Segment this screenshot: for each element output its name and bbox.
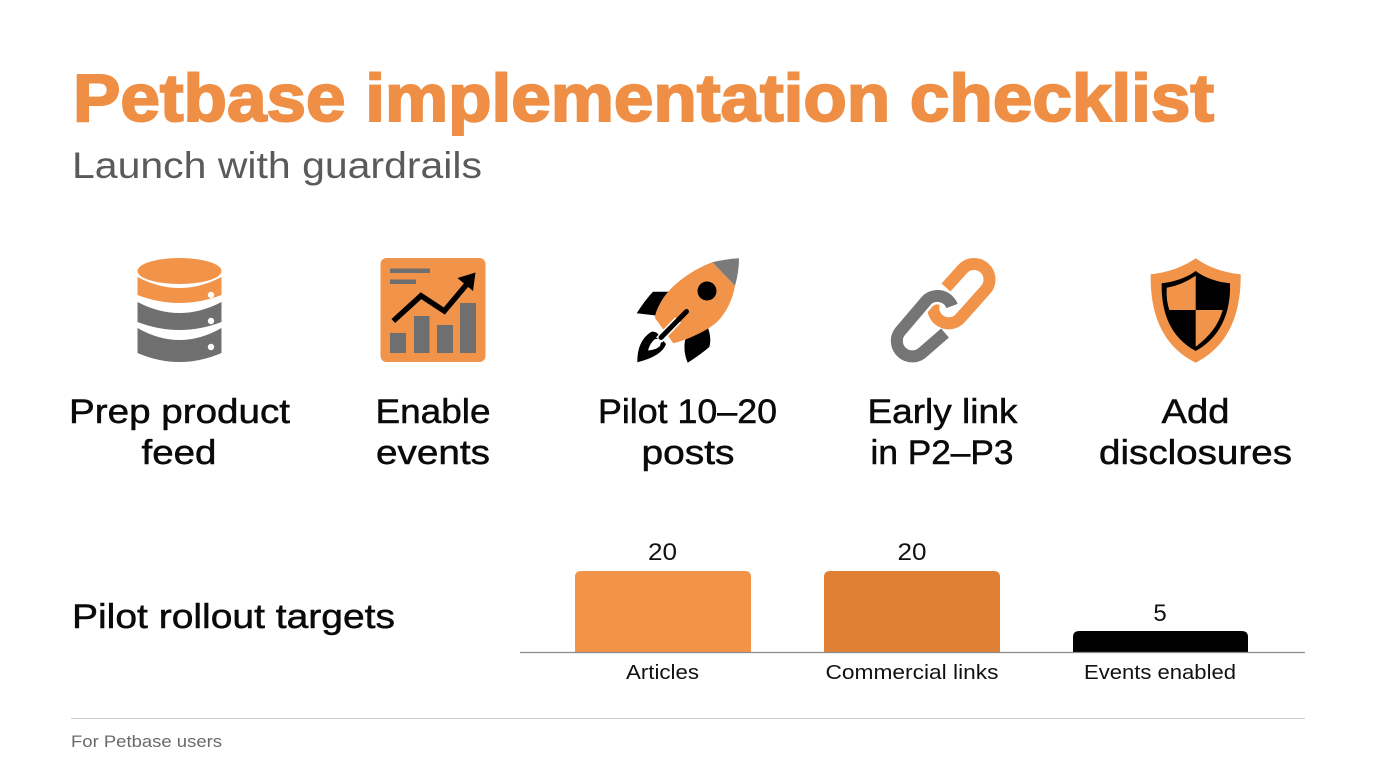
label: early link bbox=[868, 393, 1019, 472]
label: enable events bbox=[376, 393, 490, 472]
label: enable events: events bbox=[376, 434, 490, 472]
label: prep product feed bbox=[69, 393, 291, 472]
axis label: events enabled: Events enabled bbox=[1084, 662, 1236, 684]
icon: rocket bbox=[637, 258, 739, 363]
bar: commercial links bbox=[824, 571, 1000, 652]
value: commercial links: 20 bbox=[898, 539, 926, 566]
label: add disclosures: disclosures bbox=[1099, 434, 1292, 472]
label: prep product feed: feed bbox=[142, 434, 216, 472]
icon: analytics chart bbox=[380, 258, 486, 362]
label: pilot posts: posts bbox=[642, 434, 734, 472]
value: articles: 20 bbox=[648, 539, 677, 566]
icon: database bbox=[138, 258, 222, 362]
label: add disclosures: Add bbox=[1162, 393, 1230, 431]
bar: articles bbox=[575, 571, 751, 652]
subtitle: Launch with guardrails bbox=[72, 145, 482, 186]
axis label: articles: Articles bbox=[626, 662, 699, 684]
chart heading: Pilot rollout targets bbox=[72, 598, 395, 636]
label: early link: in P2–P3 bbox=[870, 434, 1014, 472]
icon: chain link bbox=[897, 264, 990, 356]
label: pilot posts bbox=[598, 393, 777, 472]
axis label: commercial links: Commercial links bbox=[826, 662, 998, 684]
label: enable events: Enable bbox=[376, 393, 490, 431]
label: prep product feed: Prep product bbox=[69, 393, 291, 431]
label: early link: Early link bbox=[868, 393, 1019, 431]
bar chart bbox=[520, 539, 1305, 684]
icon: shield bbox=[1151, 258, 1241, 363]
title: Petbase implementation checklist bbox=[73, 61, 1214, 136]
label: pilot posts: Pilot 10–20 bbox=[598, 393, 777, 431]
label: add disclosures bbox=[1099, 393, 1292, 472]
value: events enabled: 5 bbox=[1153, 600, 1167, 627]
bar: events enabled bbox=[1073, 631, 1248, 652]
footer: For Petbase users bbox=[71, 732, 222, 751]
